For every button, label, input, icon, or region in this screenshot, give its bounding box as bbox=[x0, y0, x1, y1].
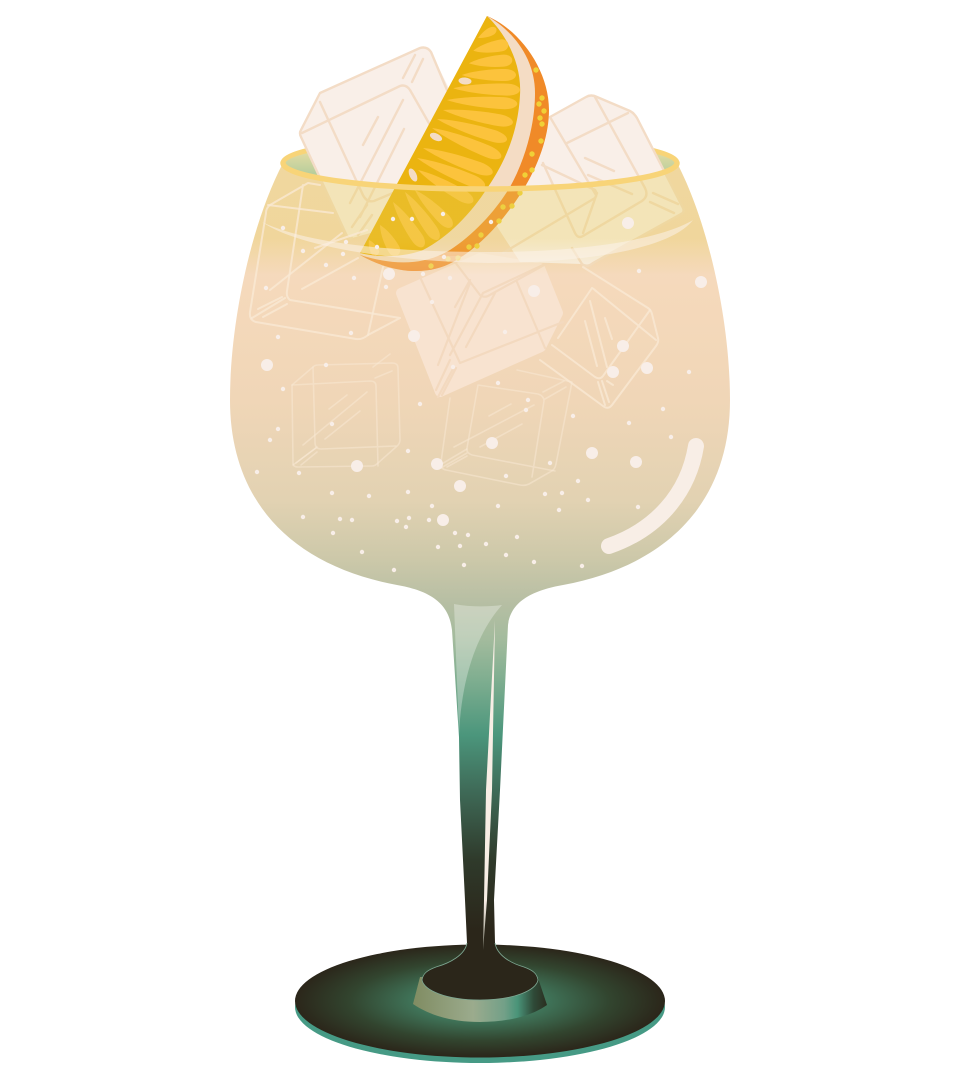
peel pores bbox=[428, 67, 547, 269]
small bubbles bbox=[255, 212, 691, 572]
back of the rim bbox=[283, 137, 677, 189]
glass body: bowl and stem bbox=[230, 163, 730, 1000]
ice cube: left, behind the wedge bbox=[300, 48, 472, 238]
large bubbles bbox=[261, 217, 707, 526]
stem cream reflection bbox=[483, 620, 495, 950]
bubbles bbox=[255, 212, 707, 572]
ice cube: lower right, submerged bbox=[540, 267, 658, 408]
ice cube: right, behind the wedge bbox=[480, 96, 684, 266]
glass tint over the upper bowl bbox=[230, 163, 730, 400]
glass foot bbox=[295, 944, 665, 1063]
ice cube: large left, submerged bbox=[250, 183, 400, 339]
stem highlight bbox=[454, 604, 502, 735]
ice cube: lower centre bbox=[401, 248, 575, 397]
peel bbox=[360, 16, 549, 271]
ice cube: small left, submerged bbox=[292, 354, 400, 467]
flesh bbox=[360, 16, 520, 256]
orange wedge bbox=[360, 16, 549, 271]
juice segments bbox=[365, 27, 520, 258]
seeds bbox=[407, 77, 472, 183]
glass highlight bbox=[609, 446, 696, 546]
lightened peel below the surface bbox=[362, 256, 462, 271]
front of the rim bbox=[283, 163, 677, 189]
stem flare outline bbox=[422, 943, 538, 1000]
liquid surface highlight bbox=[262, 220, 693, 263]
ice cube: centre bottom, submerged bbox=[440, 370, 572, 485]
pith bbox=[360, 16, 535, 262]
